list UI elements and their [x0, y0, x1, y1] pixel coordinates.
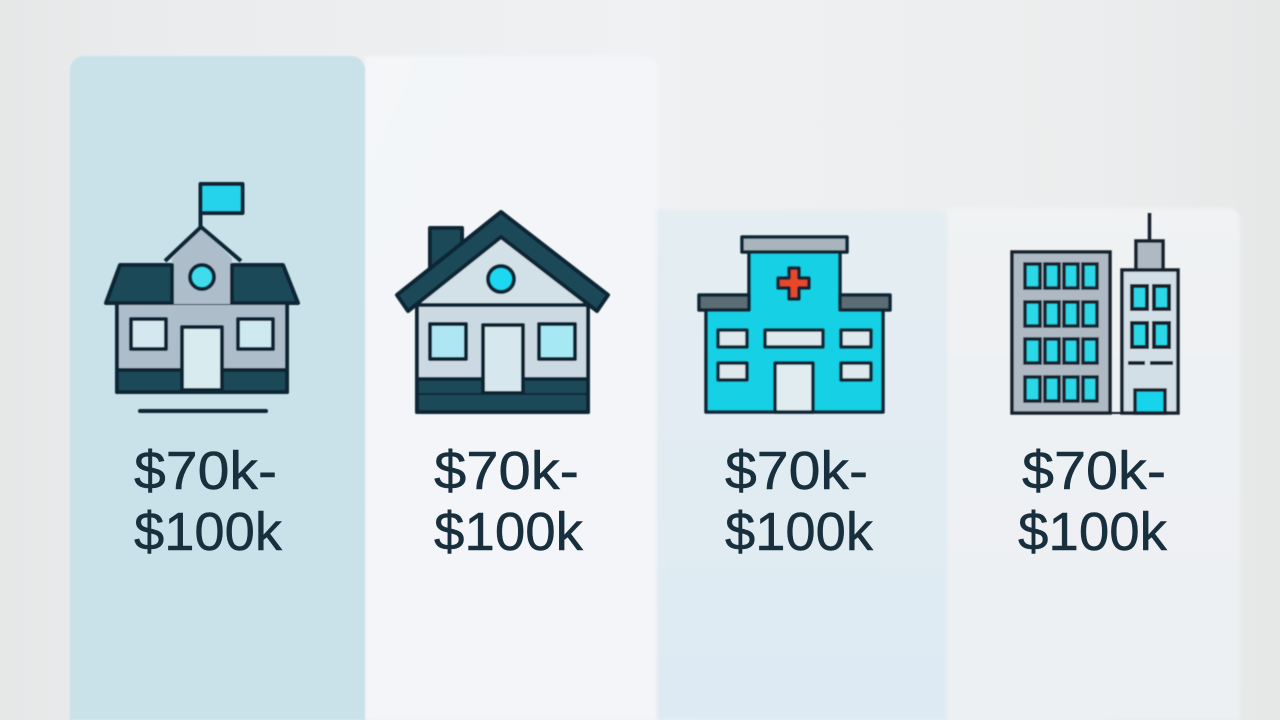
school ground line	[140, 409, 266, 413]
tower windows	[1132, 286, 1169, 347]
school left roof	[106, 265, 172, 303]
school gable	[172, 227, 232, 304]
label: column 3: $70k-	[725, 441, 868, 501]
big building	[1012, 252, 1110, 413]
panel: column 4	[947, 208, 1240, 720]
icon: office buildings	[1012, 213, 1178, 413]
school right roof	[232, 265, 298, 303]
tower body	[1122, 270, 1178, 413]
house door	[483, 325, 523, 393]
hospital door	[775, 363, 813, 412]
label: column 1: $70k-	[134, 441, 277, 501]
school right window	[238, 319, 273, 349]
tower top	[1136, 241, 1163, 270]
school flag	[200, 184, 242, 228]
label: column 1: $100k	[134, 502, 283, 562]
label: column 1	[134, 441, 283, 562]
label: column 4: $100k	[1018, 502, 1168, 562]
ground connector	[1110, 412, 1122, 414]
label: column 2: $100k	[434, 502, 584, 562]
house wall top line	[417, 303, 588, 307]
hospital body	[706, 250, 883, 412]
house left window	[430, 324, 466, 359]
house right window	[539, 324, 575, 359]
label: column 3: $100k	[725, 502, 874, 562]
house gable	[415, 235, 590, 305]
label: column 4	[1018, 441, 1168, 562]
tower dashes	[1128, 361, 1173, 365]
hospital red cross	[778, 268, 809, 299]
school door	[182, 327, 222, 390]
label: column 4: $70k-	[1022, 441, 1166, 501]
house base	[417, 379, 588, 412]
icon: hospital	[699, 237, 890, 412]
school walls	[117, 303, 287, 392]
house base stripe	[417, 393, 588, 395]
panel: column 3	[657, 210, 947, 720]
hospital right roof	[840, 295, 890, 310]
school left window	[131, 319, 166, 349]
tower antenna	[1148, 213, 1151, 241]
house chimney	[430, 228, 462, 272]
big building windows	[1025, 264, 1097, 401]
label: column 3	[725, 441, 874, 562]
icon: house	[397, 212, 608, 412]
house round window	[488, 266, 514, 292]
tower door	[1135, 390, 1165, 413]
label: column 2	[434, 441, 584, 562]
hospital left roof	[699, 295, 749, 310]
school gable roof lines	[165, 227, 241, 261]
school base	[117, 370, 287, 392]
hospital top cap	[742, 237, 847, 252]
icon: school	[106, 184, 298, 411]
school round window	[190, 265, 214, 289]
house roof	[397, 212, 608, 311]
panel: column 1	[70, 56, 365, 720]
label: column 2: $70k-	[434, 441, 579, 501]
panel: column 2	[365, 56, 658, 720]
hospital windows	[718, 330, 871, 380]
house walls	[417, 305, 588, 412]
